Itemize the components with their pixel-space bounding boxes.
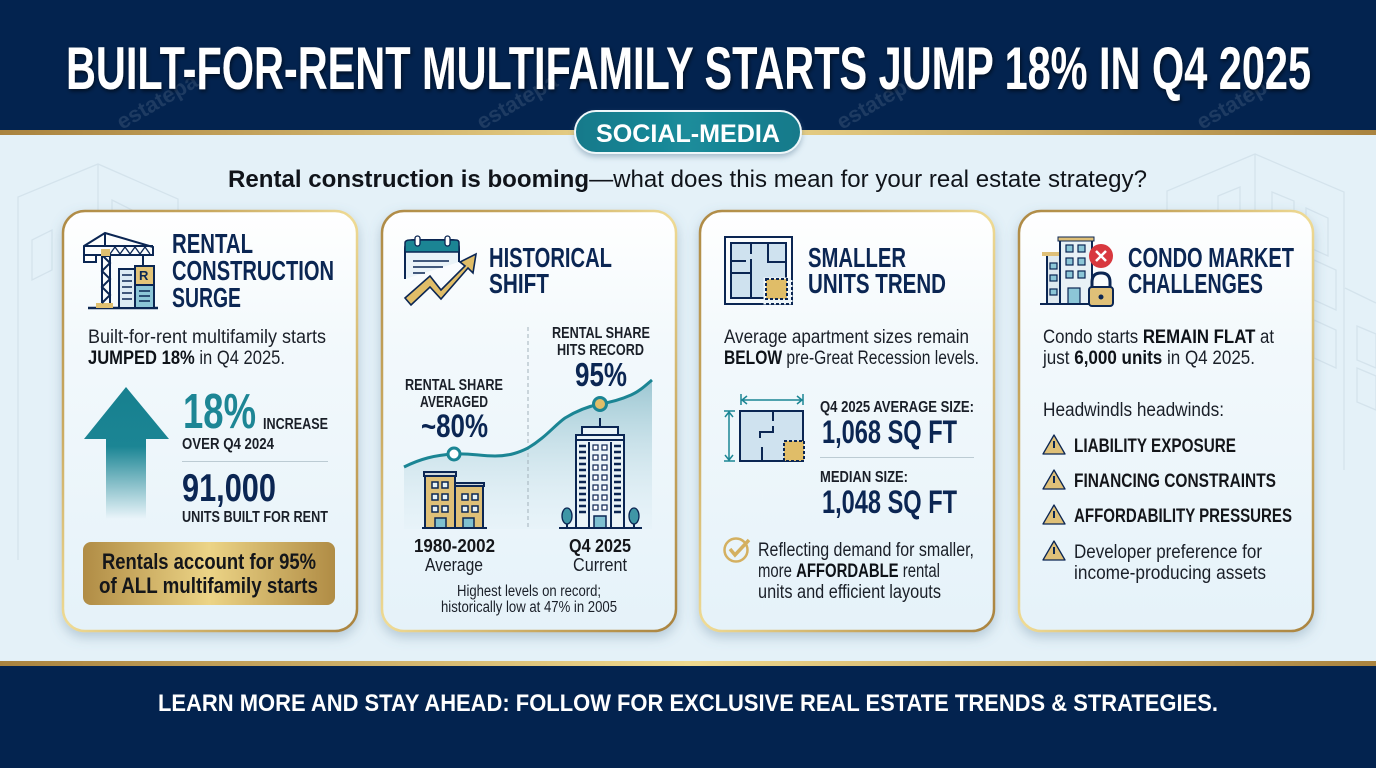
stat: average 80%: RENTAL SHARE bbox=[405, 377, 503, 394]
heading: CONSTRUCTION bbox=[172, 255, 334, 286]
stat: average 80% bbox=[405, 377, 503, 444]
panel: rental construction surge bbox=[63, 211, 357, 631]
icon: crane and building bbox=[84, 233, 158, 308]
icon: condo with lock bbox=[1040, 237, 1113, 306]
background building outlines bbox=[18, 154, 1376, 560]
watermarks bbox=[112, 68, 1282, 134]
callout: 95% of starts bbox=[83, 542, 335, 605]
takeaway text bbox=[758, 540, 974, 603]
intro text bbox=[724, 327, 979, 369]
marker: 95% bbox=[594, 398, 606, 410]
watermarks: estatepa bbox=[1192, 68, 1282, 134]
headwinds label: Headwindls headwinds: bbox=[1043, 400, 1224, 421]
axis label: 1980-2002 bbox=[414, 536, 495, 575]
icon: high-rise building bbox=[559, 418, 642, 528]
axis label: Q4 2025: Current bbox=[573, 555, 627, 575]
stat: median size bbox=[820, 469, 957, 520]
takeaway text: Reflecting demand for smaller, bbox=[758, 540, 974, 561]
takeaway text: units and efficient layouts bbox=[758, 582, 941, 603]
heading bbox=[489, 242, 612, 299]
stat: 18% increase bbox=[182, 385, 328, 453]
intro text: Average apartment sizes remain bbox=[724, 327, 969, 348]
callout: 95% of starts: of ALL multifamily starts bbox=[99, 573, 318, 598]
footnote bbox=[441, 583, 617, 616]
axis label: 1980-2002: Average bbox=[425, 555, 483, 575]
stat: median size: 1,048 SQ FT bbox=[822, 484, 957, 520]
axis label: Q4 2025: Q4 2025 bbox=[569, 536, 631, 556]
footer band bbox=[0, 661, 1376, 768]
panel: smaller units trend bbox=[700, 211, 994, 631]
headwinds list: income-producing assets bbox=[1074, 563, 1266, 584]
stat: average size: Q4 2025 AVERAGE SIZE: bbox=[820, 399, 974, 416]
footnote: historically low at 47% in 2005 bbox=[441, 599, 617, 616]
headwinds list: FINANCING CONSTRAINTS bbox=[1074, 471, 1276, 492]
intro text: JUMPED 18% in Q4 2025. bbox=[88, 348, 285, 369]
marker: 80% bbox=[448, 448, 460, 460]
stat: 91,000 units: UNITS BUILT FOR RENT bbox=[182, 509, 328, 526]
stat: record 95%: HITS RECORD bbox=[557, 342, 644, 359]
subtitle: Rental construction is booming—what does this mean for your real estate strategy? bbox=[228, 166, 1147, 193]
heading bbox=[1128, 242, 1294, 299]
badge: social-media bbox=[575, 111, 801, 153]
header gold rule bbox=[0, 130, 1376, 135]
panel: condo market challenges bbox=[1019, 211, 1313, 631]
line chart: rental share bbox=[404, 327, 652, 529]
stat: 18% increase: OVER Q4 2024 bbox=[182, 436, 274, 453]
stat: record 95% bbox=[552, 325, 650, 393]
stat: 91,000 units bbox=[182, 467, 328, 526]
icon: check bbox=[724, 538, 749, 562]
callout: 95% of starts: Rentals account for 95% bbox=[102, 549, 316, 574]
intro text: Built-for-rent multifamily starts bbox=[88, 327, 326, 348]
icon: floor plan bbox=[725, 237, 792, 304]
heading: CONDO MARKET bbox=[1128, 242, 1294, 273]
stat: median size: MEDIAN SIZE: bbox=[820, 469, 908, 486]
intro text bbox=[1042, 327, 1275, 369]
axis label: 1980-2002: 1980-2002 bbox=[414, 536, 495, 556]
badge: social-media: SOCIAL-MEDIA bbox=[596, 120, 780, 148]
watermarks: estatepa bbox=[112, 68, 202, 134]
heading: CHALLENGES bbox=[1128, 268, 1263, 299]
footer call to action: LEARN MORE AND STAY AHEAD: FOLLOW FOR EXCLUSIVE REAL ESTATE TRENDS & STRATEGIES. bbox=[158, 690, 1218, 717]
heading: SURGE bbox=[172, 282, 241, 313]
footnote: Highest levels on record; bbox=[457, 583, 601, 600]
headwinds list: LIABILITY EXPOSURE bbox=[1074, 436, 1236, 457]
header band bbox=[0, 0, 1376, 134]
heading: SHIFT bbox=[489, 268, 549, 299]
stat: 18% increase: 18% bbox=[183, 385, 256, 439]
icon: calendar with rising arrow bbox=[405, 236, 476, 305]
icon: low-rise building bbox=[422, 472, 487, 528]
stat: average 80%: AVERAGED bbox=[420, 394, 488, 411]
headwinds list: Developer preference for bbox=[1074, 542, 1263, 563]
intro text: Condo starts REMAIN FLAT at bbox=[1043, 327, 1275, 348]
intro text bbox=[88, 327, 326, 369]
panel: rental construction surge: R bbox=[139, 268, 149, 283]
heading: HISTORICAL bbox=[489, 242, 612, 273]
arrow: up bbox=[84, 387, 169, 519]
heading bbox=[808, 242, 946, 299]
takeaway text: more AFFORDABLE rental bbox=[758, 561, 940, 582]
intro text: BELOW pre-Great Recession levels. bbox=[724, 348, 979, 369]
panel: historical shift bbox=[382, 211, 676, 631]
stat: 91,000 units: 91,000 bbox=[182, 467, 276, 510]
heading: UNITS TREND bbox=[808, 268, 946, 299]
stat: record 95%: RENTAL SHARE bbox=[552, 325, 650, 342]
stat: record 95%: 95% bbox=[575, 356, 627, 393]
heading: SMALLER bbox=[808, 242, 906, 273]
axis label: Q4 2025 bbox=[569, 536, 631, 575]
stat: average size bbox=[820, 399, 974, 450]
icon: warning bbox=[1043, 435, 1065, 560]
headwinds list: AFFORDABILITY PRESSURES bbox=[1074, 506, 1292, 527]
intro text: just 6,000 units in Q4 2025. bbox=[1042, 348, 1255, 369]
watermarks: estatepa bbox=[472, 68, 562, 134]
heading: RENTAL bbox=[172, 228, 253, 259]
stat: 18% increase: INCREASE bbox=[263, 416, 328, 433]
watermarks: estatepa bbox=[832, 68, 922, 134]
stat: average 80%: ~80% bbox=[421, 408, 488, 444]
stat: average size: 1,068 SQ FT bbox=[822, 414, 957, 450]
heading bbox=[172, 228, 334, 313]
icon: dimensioned plan bbox=[724, 394, 804, 461]
headwinds list bbox=[1043, 435, 1292, 584]
